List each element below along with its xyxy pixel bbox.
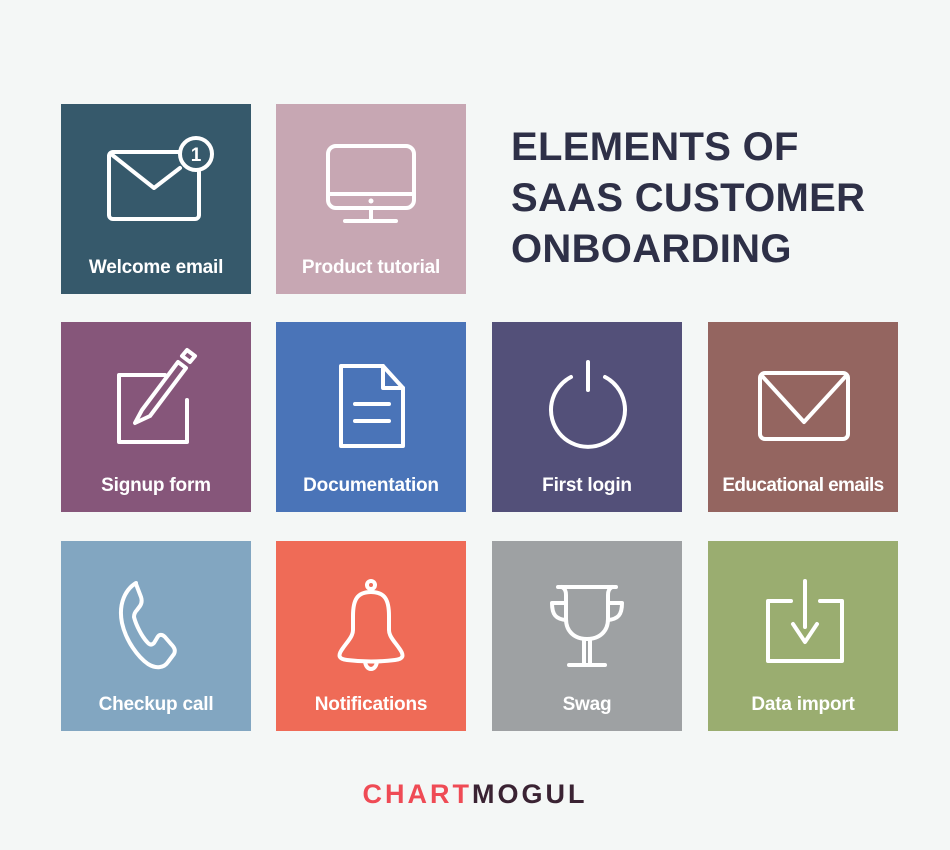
icon: download box [766,579,844,663]
icon: document [339,364,405,448]
tile: swag [492,541,682,731]
icon: envelope with badge [107,136,214,221]
tile: educational emails: Educational emails [722,475,884,496]
icon: pencil form [117,348,198,444]
tile: notifications: Notifications [315,694,427,715]
tile: welcome email [61,104,251,294]
icon: phone [118,581,177,670]
tile: notifications [276,541,466,731]
title: ONBOARDING [511,227,792,271]
icon: bell [338,579,404,671]
logo: chartmogul: CHARTMOGUL [362,779,588,809]
tile: documentation [276,322,466,512]
icon: trophy [550,584,624,667]
tile: checkup call [61,541,251,731]
tile: product tutorial [276,104,466,294]
tile: swag: Swag [563,694,611,715]
tile: signup form: Signup form [101,475,211,496]
tile: data import [708,541,898,731]
icon: envelope [758,371,850,441]
icon: monitor [326,144,416,223]
title [511,125,865,271]
tile: welcome email: Welcome email [89,257,223,278]
tile: documentation: Documentation [303,475,439,496]
tile: product tutorial: Product tutorial [302,257,440,278]
tile: signup form [61,322,251,512]
title: ELEMENTS OF [511,125,799,169]
tile: data import: Data import [751,694,855,715]
tile: first login: First login [542,475,632,496]
tile: checkup call: Checkup call [99,694,213,715]
icon: power [549,360,627,449]
icon: envelope with badge: 1 [191,145,202,166]
tile: first login [492,322,682,512]
title: SAAS CUSTOMER [511,176,865,220]
tile: educational emails [708,322,898,512]
